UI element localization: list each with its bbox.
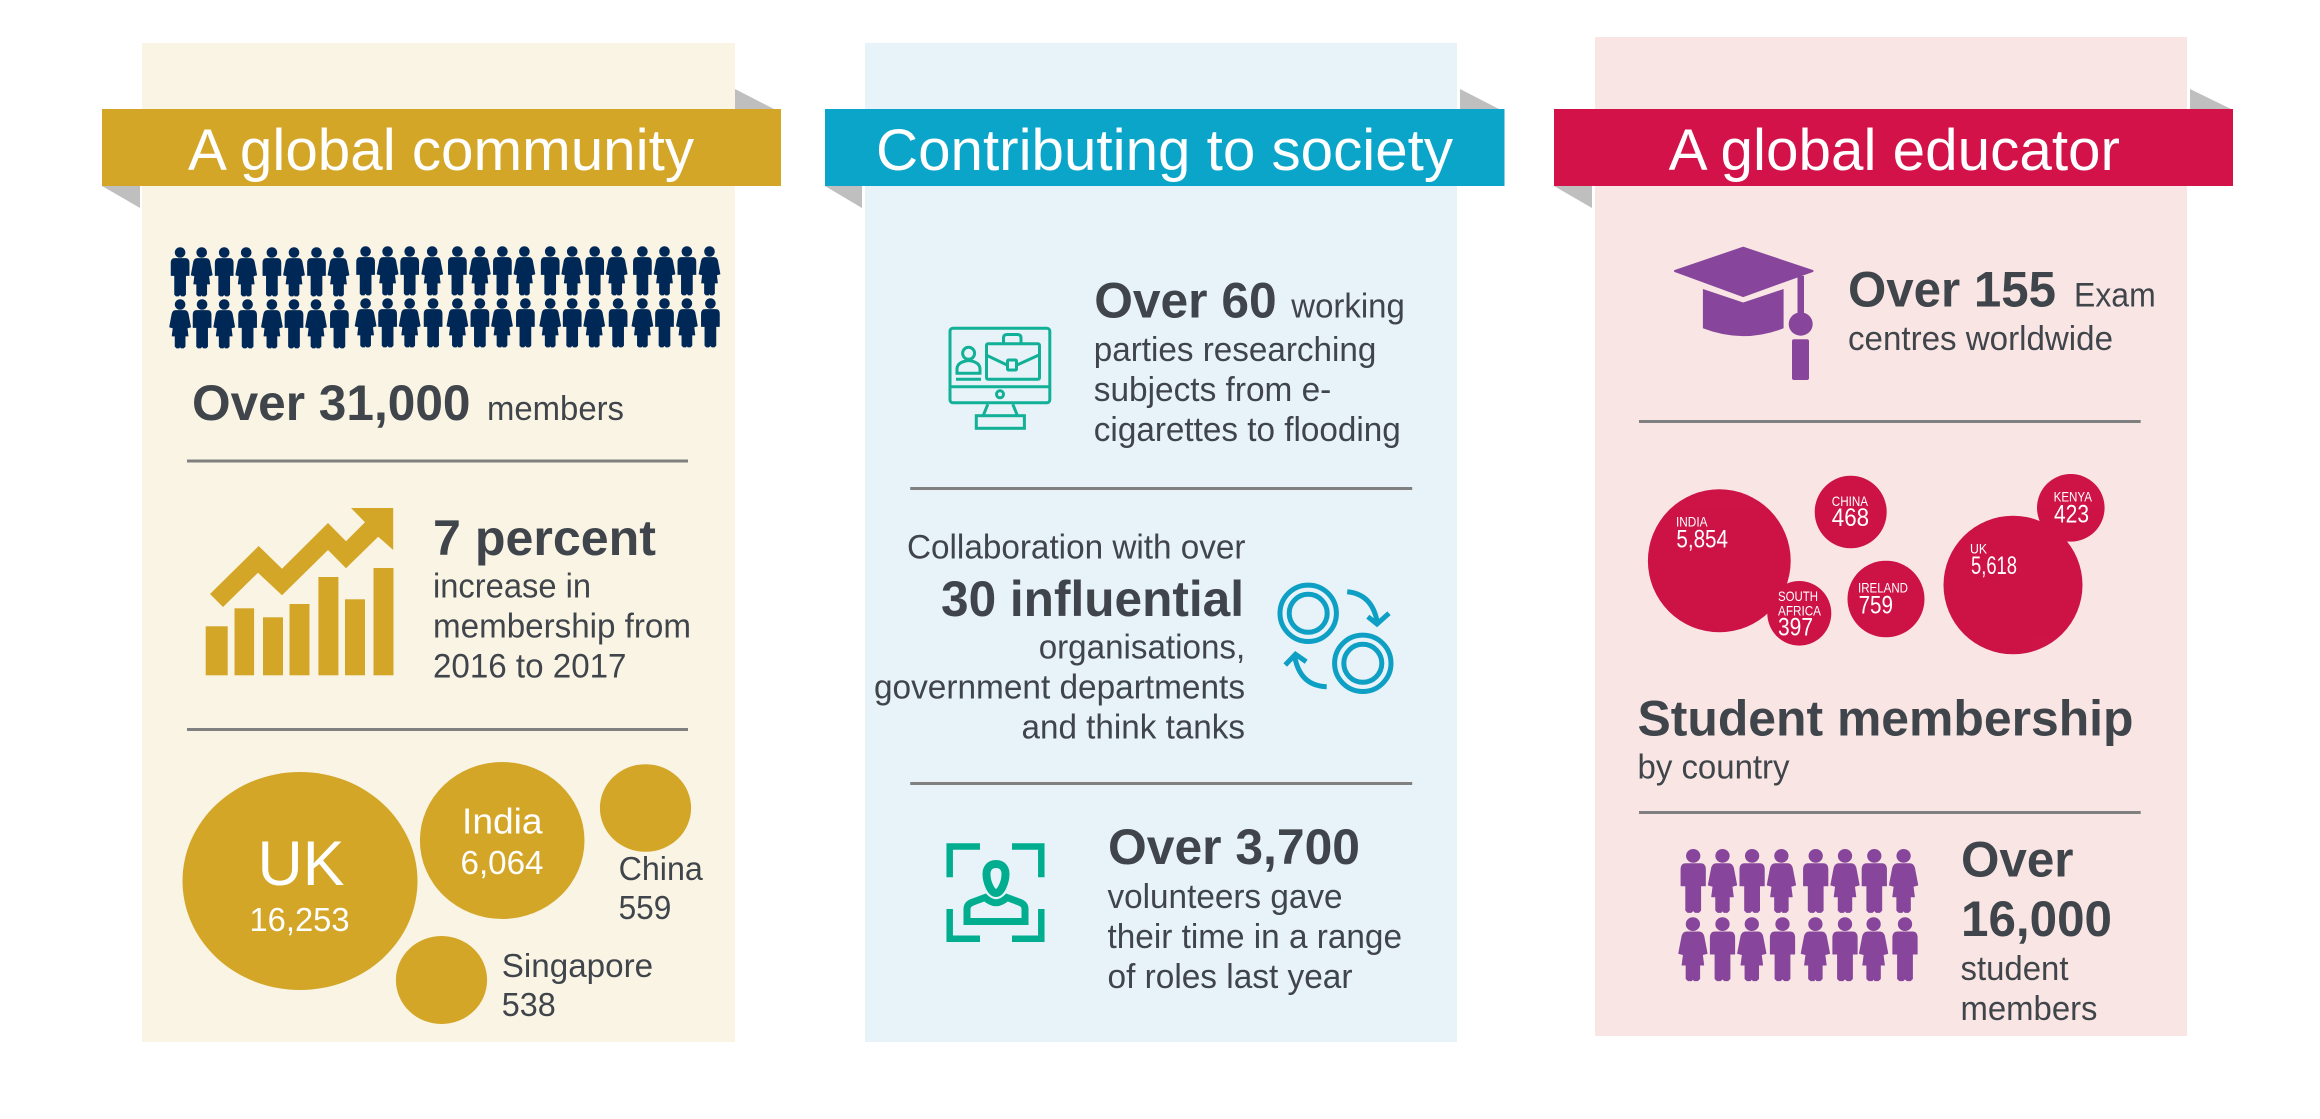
text: over 60 working parties: Over 60 <box>1094 272 1277 328</box>
text: over 3,700 volunteers <box>1108 819 1402 996</box>
text: 7 percent increase in membership: 2016 to 2017 <box>433 647 626 685</box>
bubble: China <box>600 764 703 926</box>
bubble: Singapore <box>396 936 653 1024</box>
banner: a global educator: A global educator <box>1669 118 2120 183</box>
text: over 3,700 volunteers: of roles last year <box>1108 958 1352 996</box>
icon: graduation cap <box>1675 248 1813 380</box>
banner: a global community: A global community <box>188 118 694 183</box>
chart: student membership bubbles: SOUTH <box>1778 588 1818 604</box>
text: over 31,000 members: Over 31,000 <box>192 375 470 431</box>
text: collaboration with over 30 influential organisations <box>874 528 1246 746</box>
chart: student membership bubbles: 759 <box>1859 591 1893 619</box>
icon: monitor with briefcase and person <box>950 328 1050 428</box>
text: over 60 working parties: parties researching <box>1094 331 1376 369</box>
banner: contributing to society: Contributing to society <box>876 118 1453 183</box>
text: 7 percent increase in membership <box>433 510 691 685</box>
bubble: India <box>420 762 584 919</box>
bubble: Singapore: Singapore <box>502 947 653 984</box>
text: over 16,000 student members: members <box>1960 990 2098 1028</box>
banner: contributing to society <box>825 89 1504 208</box>
heading: student membership by country: by country <box>1638 748 1790 786</box>
text: over 155 exam centres worldwide: centres worldwide <box>1848 320 2113 358</box>
chart: student membership bubbles: 468 <box>1832 504 1869 532</box>
panel: a global community <box>102 43 781 1042</box>
chart: student membership bubbles: UK <box>1970 540 1988 556</box>
bubble: India: India <box>462 800 544 841</box>
icon: volunteer person in focus frame <box>950 846 1041 939</box>
text: collaboration with over 30 influential organisations: Collaboration with over <box>907 528 1246 566</box>
text: over 60 working parties: cigarettes to flooding <box>1094 411 1401 449</box>
chart: student membership bubbles: INDIA <box>1676 514 1708 530</box>
chart: student membership bubbles: 5,618 <box>1971 552 2017 580</box>
icon: rows of people representing members <box>170 247 720 348</box>
text: 7 percent increase in membership: 7 percent <box>433 510 656 566</box>
text: over 155 exam centres worldwide: Exam <box>2074 277 2156 315</box>
chart: student membership bubbles: KENYA <box>2054 489 2093 505</box>
chart: student membership bubbles: CHINA <box>1832 493 1869 509</box>
chart: student membership bubbles: 397 <box>1778 614 1813 642</box>
chart: student membership bubbles: AFRICA <box>1778 602 1822 618</box>
bubble: UK <box>182 772 418 990</box>
bubble: Singapore: 538 <box>502 986 556 1023</box>
text: over 16,000 student members <box>1960 832 2112 1028</box>
text: over 155 exam centres worldwide <box>1848 262 2156 358</box>
text: over 60 working parties: working <box>1290 287 1405 325</box>
text: over 31,000 members: members <box>487 390 624 428</box>
text: collaboration with over 30 influential organisations: organisations, <box>1039 628 1245 666</box>
panel: contributing to society <box>825 43 1504 1042</box>
text: over 60 working parties: subjects from e- <box>1094 371 1331 409</box>
banner: a global community <box>102 89 781 208</box>
text: over 16,000 student members: Over <box>1961 832 2074 888</box>
bubble: China: 559 <box>619 889 671 926</box>
icon: rows of student figures <box>1679 850 1918 981</box>
text: collaboration with over 30 influential organisations: 30 influential <box>941 571 1244 627</box>
icon: rings with circular arrows <box>1280 585 1391 692</box>
bubble: UK: UK <box>258 829 344 899</box>
icon: rising bar chart with arrow <box>206 508 394 675</box>
chart: student membership bubbles: 5,854 <box>1676 526 1728 554</box>
chart: student membership bubbles: 423 <box>2054 500 2089 528</box>
banner: a global educator <box>1554 89 2233 208</box>
text: collaboration with over 30 influential organisations: government departments <box>874 668 1245 706</box>
chart: student membership bubbles: IRELAND <box>1858 580 1908 596</box>
bubble: India: 6,064 <box>460 844 544 881</box>
text: over 16,000 student members: student <box>1960 950 2069 988</box>
text: over 60 working parties <box>1094 272 1405 449</box>
text: 7 percent increase in membership: membership from <box>433 607 691 645</box>
text: over 155 exam centres worldwide: Over 155 <box>1848 262 2056 318</box>
bubble: UK: 16,253 <box>250 901 350 938</box>
text: over 16,000 student members: 16,000 <box>1961 891 2112 947</box>
chart: members by country bubbles <box>182 762 703 1024</box>
text: 7 percent increase in membership: increase in <box>433 567 591 605</box>
text: over 3,700 volunteers: volunteers gave <box>1108 878 1342 916</box>
bubble: China: China <box>619 850 703 887</box>
heading: student membership by country: Student membership <box>1638 691 2134 747</box>
text: collaboration with over 30 influential organisations: and think tanks <box>1022 708 1245 746</box>
heading: student membership by country <box>1638 691 2134 786</box>
chart: student membership bubbles <box>1648 474 2105 654</box>
text: over 3,700 volunteers: their time in a range <box>1108 918 1402 956</box>
panel: a global educator <box>1554 37 2233 1036</box>
text: over 3,700 volunteers: Over 3,700 <box>1108 819 1360 875</box>
text: over 31,000 members <box>192 375 624 431</box>
